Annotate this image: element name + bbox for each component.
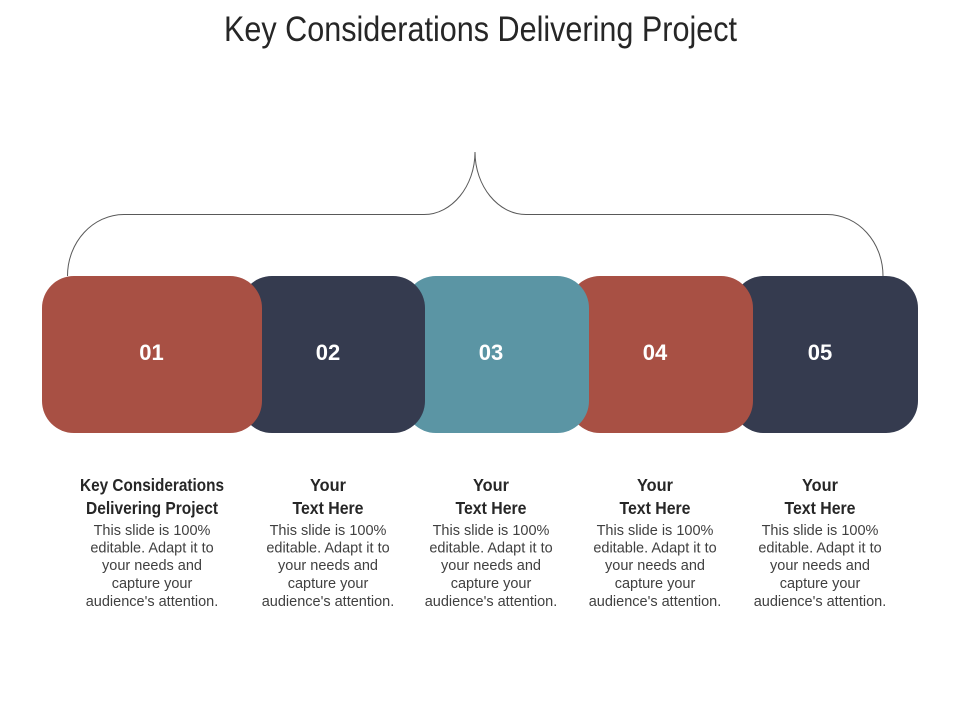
body 1: This slide is 100% — [94, 523, 211, 539]
heading 2: Your — [310, 475, 346, 495]
body 1: audience's attention. — [86, 594, 218, 610]
body 3 — [425, 523, 557, 610]
step numbers — [139, 340, 832, 365]
curly brace connector — [68, 152, 883, 276]
body 1: editable. Adapt it to — [90, 540, 214, 556]
body 3: audience's attention. — [425, 594, 557, 610]
body 5: audience's attention. — [754, 594, 886, 610]
body 1: your needs and — [102, 558, 202, 574]
heading 5 — [784, 475, 856, 518]
body 4: This slide is 100% — [597, 523, 714, 539]
body 3: editable. Adapt it to — [429, 540, 553, 556]
heading 4 — [620, 475, 691, 518]
heading 5: Text Here — [784, 498, 856, 518]
number 02: 02 — [316, 340, 340, 365]
heading 1: Key Considerations — [80, 475, 224, 495]
number 01: 01 — [139, 340, 164, 365]
heading 1: Delivering Project — [86, 498, 218, 518]
step blocks — [42, 276, 918, 433]
body 3: your needs and — [441, 558, 541, 574]
heading 5: Your — [802, 475, 838, 495]
body 5: editable. Adapt it to — [758, 540, 882, 556]
body 5: your needs and — [770, 558, 870, 574]
block 02 — [240, 276, 425, 433]
heading 1 — [80, 475, 224, 518]
body 2: your needs and — [278, 558, 378, 574]
block 03 — [404, 276, 589, 433]
body 2: This slide is 100% — [270, 523, 387, 539]
column 4 text — [589, 475, 721, 610]
heading 2: Text Here — [292, 498, 364, 518]
body 5: capture your — [780, 576, 860, 592]
body 2: editable. Adapt it to — [266, 540, 390, 556]
body 4: capture your — [615, 576, 695, 592]
column 1 text — [80, 475, 224, 610]
heading 2 — [292, 475, 364, 518]
body 1: capture your — [112, 576, 192, 592]
body 3: This slide is 100% — [433, 523, 550, 539]
body 2: audience's attention. — [262, 594, 394, 610]
body 5 — [754, 523, 886, 610]
body 3: capture your — [451, 576, 531, 592]
block 04 — [568, 276, 753, 433]
number 04: 04 — [643, 340, 668, 365]
body 4 — [589, 523, 721, 610]
heading 3: Your — [473, 475, 509, 495]
column 5 text — [754, 475, 886, 610]
block 01 — [42, 276, 262, 433]
number 03: 03 — [479, 340, 503, 365]
body 5: This slide is 100% — [762, 523, 879, 539]
block 05 — [732, 276, 918, 433]
title: Key Considerations Delivering Project — [224, 10, 737, 49]
heading 4: Text Here — [620, 498, 691, 518]
column 3 text — [425, 475, 557, 610]
column 2 text — [262, 475, 394, 610]
body 1 — [86, 523, 218, 610]
heading 3 — [456, 475, 527, 518]
body 2: capture your — [288, 576, 368, 592]
heading 4: Your — [637, 475, 673, 495]
number 05: 05 — [808, 340, 832, 365]
body 4: your needs and — [605, 558, 705, 574]
heading 3: Text Here — [456, 498, 527, 518]
body 2 — [262, 523, 394, 610]
body 4: audience's attention. — [589, 594, 721, 610]
body 4: editable. Adapt it to — [593, 540, 717, 556]
